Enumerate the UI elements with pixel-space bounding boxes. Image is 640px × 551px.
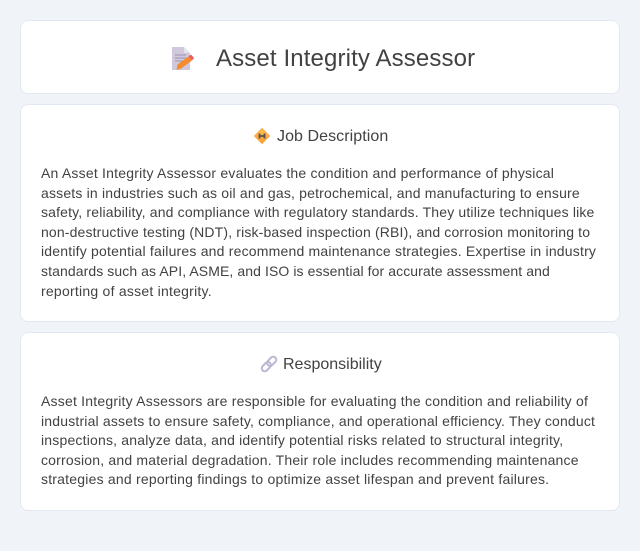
text: job description: [41, 165, 596, 299]
icon: orange warning diamond: [254, 128, 270, 144]
text: job description: An Asset Integrity Assessor evaluates the condition and performance of physical: [41, 165, 554, 181]
text: job description: safety, reliability, and compliance with regulatory standards. They utilize techniques like: [41, 204, 595, 220]
text: job description: assets in industries such as oil and gas, petrochemical, and manufacturing to ensure: [41, 185, 580, 201]
heading: responsibility: Responsibility: [283, 356, 382, 373]
text: job description: standards such as API, ASME, and ISO is essential for accurate assessment and: [41, 263, 550, 279]
text: responsibility: strategies and reporting findings to optimize asset lifespan and prevent failures.: [41, 471, 549, 487]
icon: chain link: [260, 356, 278, 372]
text: job description: non-destructive testing (NDT), risk-based inspection (RBI), and corrosion monitoring to: [41, 224, 590, 240]
panel: job description: [20, 104, 620, 322]
text: responsibility: [41, 393, 595, 487]
icon: document with pencil: [172, 47, 194, 70]
heading: job description: Job Description: [277, 128, 388, 145]
text: responsibility: corrosion, and material degradation. Their role includes recommending maintenance: [41, 452, 579, 468]
panel: title card: [20, 20, 620, 94]
text: responsibility: industrial assets to ensure safety, compliance, and operational efficiency. They conduct: [41, 413, 595, 429]
text: job description: reporting of asset integrity.: [41, 283, 212, 299]
panel: responsibility: [20, 332, 620, 511]
text: responsibility: Asset Integrity Assessors are responsible for evaluating the condition and reliability of: [41, 393, 588, 409]
text: job description: identify potential failures and recommend maintenance strategies. Expertise in industry: [41, 243, 596, 259]
title: Asset Integrity Assessor: [216, 45, 475, 72]
text: responsibility: inspections, analyze data, and identify potential risks related to structural integrity,: [41, 432, 563, 448]
